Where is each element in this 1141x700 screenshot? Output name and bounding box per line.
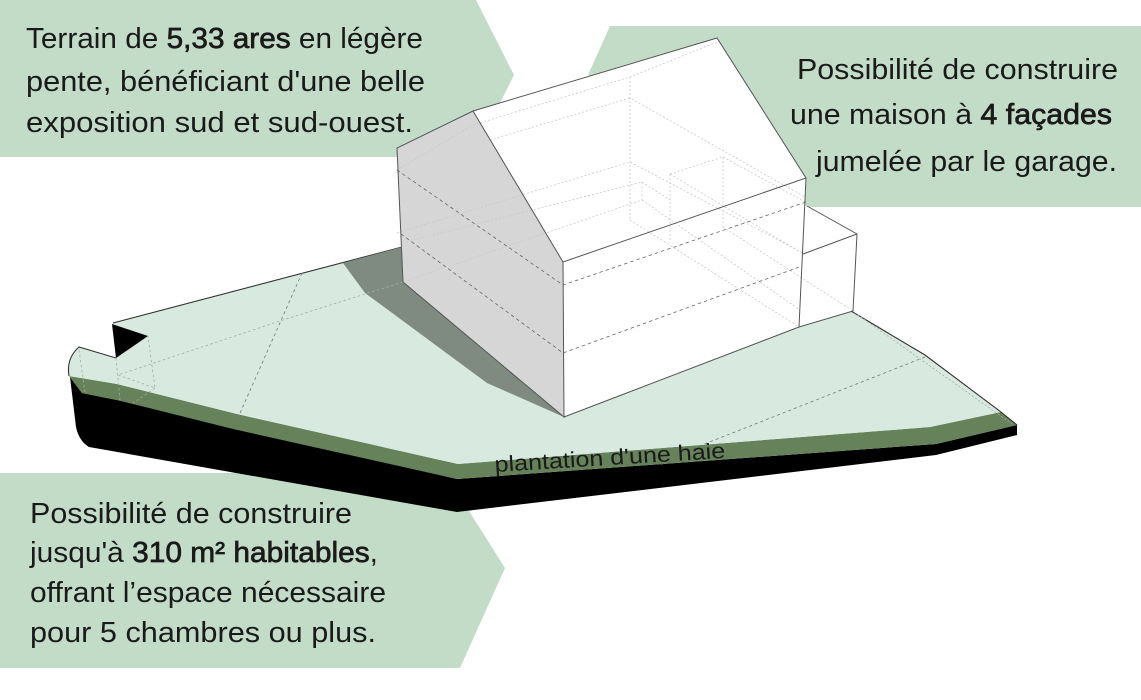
black base of the plot bbox=[70, 377, 1017, 512]
text block: habitable surface bbox=[29, 498, 386, 649]
panel: façades background bbox=[588, 26, 1141, 207]
text block: façades: Possibilité de construire bbox=[797, 54, 1118, 86]
house shadow bbox=[343, 247, 564, 417]
text block: terrain: Terrain de 5,33 ares en légère bbox=[26, 23, 423, 55]
green hedge strip bbox=[69, 376, 1017, 479]
plot outline bbox=[68, 247, 1017, 425]
house volume bbox=[397, 38, 857, 417]
text block: habitable surface: offrant l’espace nécessaire bbox=[30, 577, 386, 609]
floor level dashed lines bbox=[397, 170, 806, 353]
text block: terrain bbox=[26, 23, 425, 139]
garage annex bbox=[799, 206, 857, 327]
dotted interior lines bbox=[397, 42, 853, 327]
panel: terrain background bbox=[0, 0, 514, 157]
front façade bbox=[563, 178, 806, 417]
label: hedge planting: plantation d'une haie bbox=[494, 438, 726, 477]
plot of land bbox=[68, 247, 1017, 512]
ground surface bbox=[68, 247, 1001, 464]
setback lines on ground bbox=[233, 273, 925, 465]
house outlines bbox=[397, 38, 857, 417]
notch in plot bbox=[112, 324, 148, 358]
text block: façades bbox=[790, 54, 1118, 178]
lighter setback lines on the left of the plot bbox=[79, 282, 403, 403]
roof slope bbox=[473, 38, 806, 262]
text block: façades: une maison à 4 façades bbox=[790, 99, 1112, 131]
text block: habitable surface: jusqu'à 310 m² habitables, bbox=[29, 537, 378, 569]
text block: habitable surface: Possibilité de construire bbox=[30, 498, 352, 530]
text block: habitable surface: pour 5 chambres ou plus. bbox=[30, 617, 376, 649]
text block: façades: jumelée par le garage. bbox=[815, 146, 1117, 178]
panel: habitable surface background bbox=[0, 473, 505, 668]
gable side wall bbox=[397, 111, 564, 417]
dotted line towards the corner bbox=[851, 310, 1012, 424]
text block: terrain: exposition sud et sud-ouest. bbox=[26, 107, 413, 139]
text block: terrain: pente, bénéficiant d'une belle bbox=[26, 66, 425, 98]
